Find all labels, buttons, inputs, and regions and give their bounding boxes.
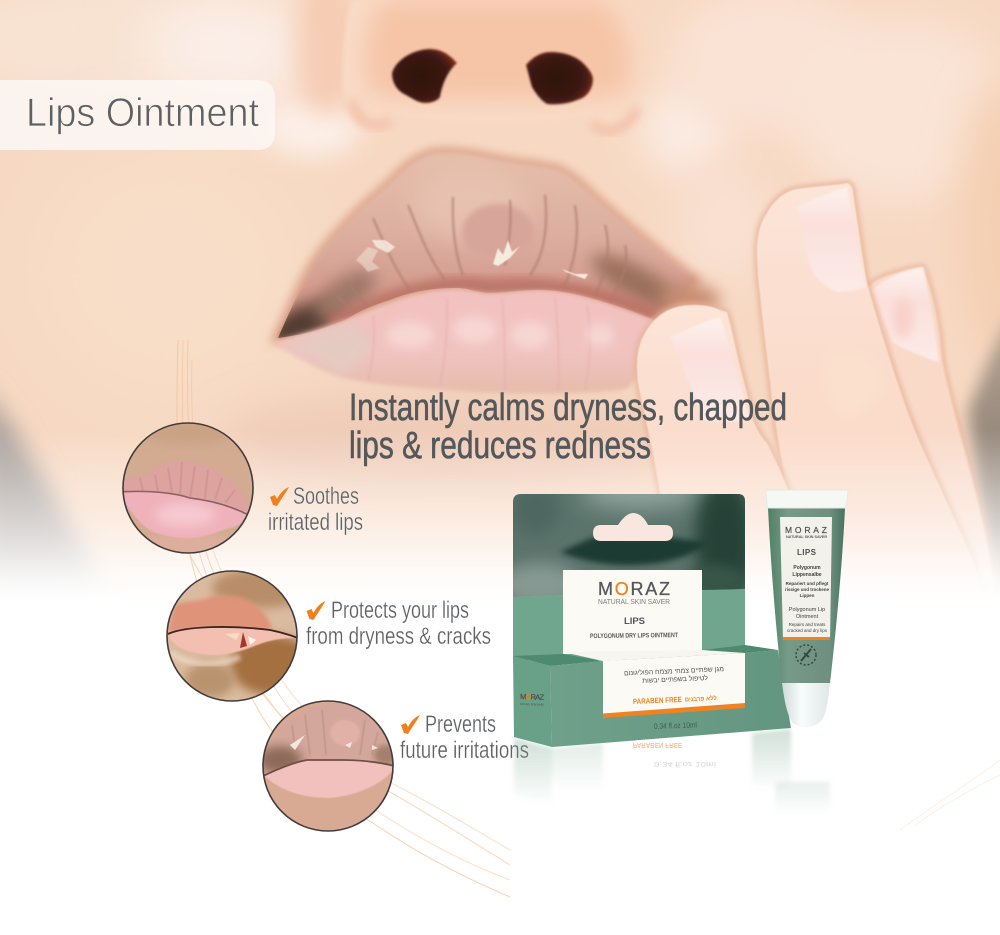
product tube: Lippen <box>800 593 815 598</box>
title badge: Lips Ointment: Lips Ointment <box>26 91 259 135</box>
product tube: Ointment <box>796 614 819 620</box>
nose <box>295 0 644 132</box>
left finger <box>637 305 800 600</box>
box front face: PARABEN FREE <box>633 695 682 706</box>
box front face: NATURAL SKIN SAVER <box>520 702 545 707</box>
benefit 3: prevents <box>400 711 529 764</box>
benefit 3: prevents: future irritations <box>400 737 529 764</box>
benefit 3: prevents: Prevents <box>425 711 496 738</box>
box white label: LIPS <box>624 616 645 627</box>
product tube: cracked and dry lips <box>787 628 828 633</box>
product reflection: 0.34 fl.oz 10ml <box>654 760 716 769</box>
benefit 2: protects <box>306 597 491 650</box>
headline: Instantly calms dryness, chapped <box>349 387 787 429</box>
nostril left <box>392 49 457 103</box>
fingers <box>637 183 995 600</box>
box front face: MORAZ <box>520 692 545 702</box>
product tube: Polygonum <box>793 565 821 571</box>
box white label <box>563 570 702 654</box>
headline: lips & reduces redness <box>349 425 651 467</box>
benefit 1: soothes: Soothes <box>293 483 359 510</box>
nostril right <box>526 52 593 104</box>
box white label: MORAZ <box>598 579 670 599</box>
box front face: ללא פרבנים <box>685 694 718 703</box>
index finger <box>757 183 985 600</box>
benefit 1: soothes <box>268 483 363 536</box>
box front face <box>513 645 791 747</box>
benefit 2: protects: Protects your lips <box>331 597 469 624</box>
product tube <box>766 490 848 727</box>
background: close-up face photo <box>0 0 1000 580</box>
box white label: POLYGONUM DRY LIPS OINTMENT <box>590 632 678 640</box>
third finger <box>866 267 995 600</box>
circle photo 3: chapped lips <box>262 700 394 832</box>
lips <box>260 153 696 394</box>
box front face: לטיפול בשפתיים יבשות <box>642 674 708 685</box>
hanger hole <box>593 513 673 541</box>
benefit 2: protects: from dryness & cracks <box>306 623 491 650</box>
product reflection <box>514 729 830 815</box>
product box <box>513 494 791 747</box>
product tube: Lippensalbe <box>792 572 822 578</box>
title badge: Lips Ointment <box>0 80 275 150</box>
hair: left <box>0 385 110 600</box>
headline <box>349 387 787 467</box>
circle photo 2: dry cracked lips <box>166 570 298 702</box>
product tube: Polygonum Lip <box>789 607 825 613</box>
circle photo 1: irritated lips <box>122 422 254 554</box>
lower lip <box>273 290 660 394</box>
product tube: rissige und trockene <box>785 587 830 592</box>
box white label: NATURAL SKIN SAVER <box>598 597 671 606</box>
benefit 1: soothes: irritated lips <box>268 509 363 536</box>
decorative orange arc lines <box>177 340 1000 897</box>
box back panel: photo of lips <box>513 494 745 660</box>
product tube: MORAZ <box>785 525 827 535</box>
product tube: LIPS <box>797 548 817 557</box>
product tube: Repariert und pflegt <box>786 581 829 586</box>
box front face: מגן שפתיים צמחי מצמח הפוליגונום <box>624 665 724 677</box>
product tube: Repairs and treats <box>789 622 826 627</box>
product reflection: PARABEN FREE <box>633 741 682 750</box>
product tube: NATURAL SKIN SAVER <box>786 535 827 539</box>
box front face: 0.34 fl.oz 10ml <box>654 720 697 731</box>
hair: right <box>968 320 1000 600</box>
